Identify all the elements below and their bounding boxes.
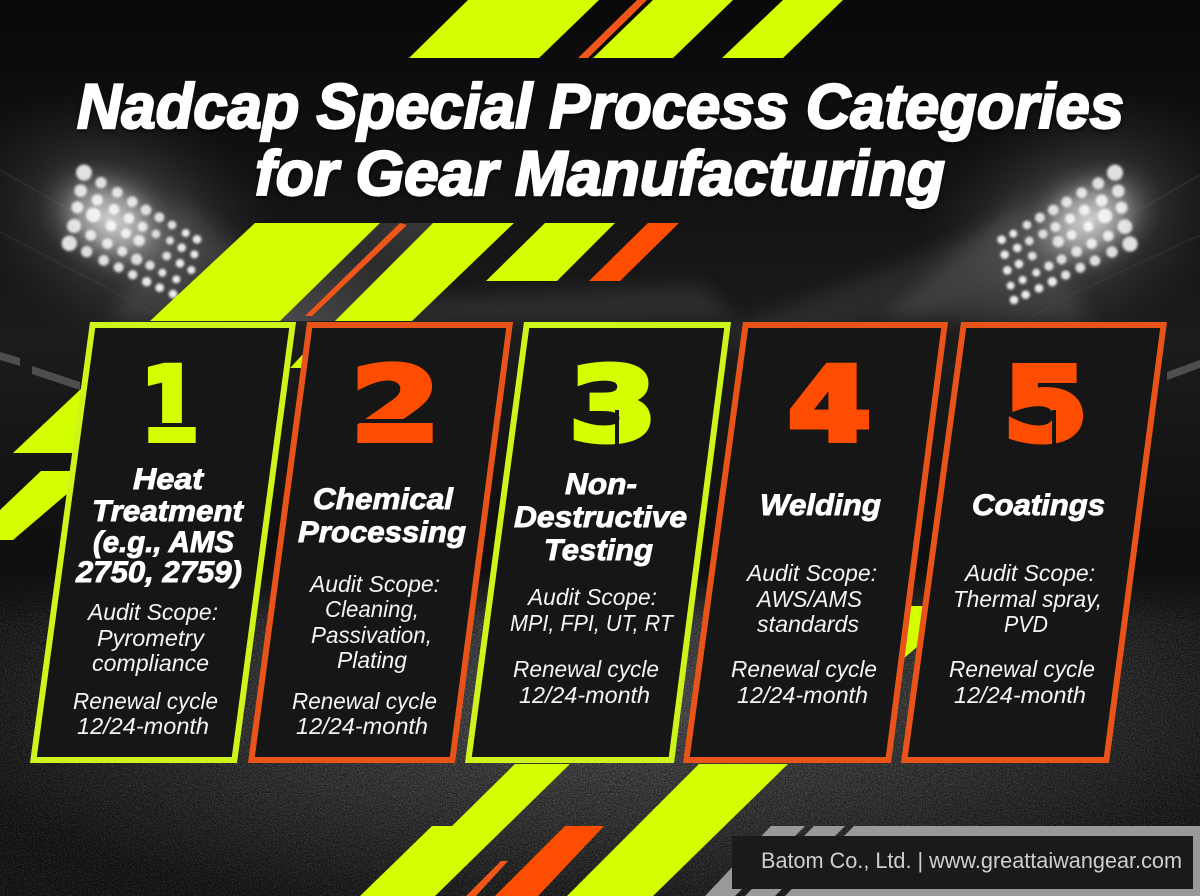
audit scope text: Audit Scope: xyxy=(86,599,218,625)
audit scope text: Plating xyxy=(337,647,407,673)
number 2: 2 xyxy=(351,346,440,465)
title: Nadcap Special Process Categories xyxy=(77,72,1124,142)
audit scope text: PVD xyxy=(1004,611,1048,637)
heading: chemical processing xyxy=(298,483,466,549)
audit scope text: Audit Scope: xyxy=(526,584,657,610)
number 1: 1 xyxy=(141,346,199,465)
audit scope text xyxy=(510,584,675,636)
renewal cycle text xyxy=(949,656,1095,708)
audit scope text xyxy=(745,560,877,637)
title xyxy=(77,72,1124,209)
audit scope text: Pyrometry xyxy=(97,625,206,651)
heading: heat treatment: Treatment xyxy=(92,495,245,528)
heading: chemical processing: Processing xyxy=(298,516,466,549)
heading: chemical processing: Chemical xyxy=(313,483,454,516)
renewal cycle text xyxy=(731,656,877,708)
heading: welding: Welding xyxy=(760,489,881,522)
middle diagonal stripes xyxy=(0,223,923,659)
heading: heat treatment: Heat xyxy=(133,463,205,496)
panel: non-destructive testing xyxy=(468,325,728,760)
audit scope text xyxy=(308,571,440,673)
heading: non-destructive testing: Destructive xyxy=(514,501,687,534)
audit scope text xyxy=(86,599,218,676)
audit scope text: Passivation, xyxy=(311,622,432,648)
panel: heat treatment xyxy=(33,325,293,760)
bottom diagonal stripes xyxy=(360,764,1200,896)
left stadium floodlight xyxy=(0,32,338,418)
audit scope text: Cleaning, xyxy=(325,596,419,622)
renewal cycle text: 12/24-month xyxy=(737,682,868,708)
renewal cycle text xyxy=(292,688,437,739)
renewal cycle text: Renewal cycle xyxy=(292,688,437,714)
renewal cycle text: Renewal cycle xyxy=(73,688,218,714)
heading: non-destructive testing xyxy=(514,468,687,567)
number 4: 4 xyxy=(788,346,871,465)
audit scope text: Audit Scope: xyxy=(308,571,440,597)
heading: non-destructive testing: Non- xyxy=(565,468,637,501)
panel: chemical processing xyxy=(251,325,510,760)
audit scope text: MPI, FPI, UT, RT xyxy=(510,610,675,636)
right stadium floodlight xyxy=(862,32,1200,418)
number 5: 5 xyxy=(1003,346,1088,465)
renewal cycle text: 12/24-month xyxy=(77,713,209,739)
renewal cycle text xyxy=(73,688,218,739)
top diagonal stripes xyxy=(409,0,843,58)
renewal cycle text: Renewal cycle xyxy=(513,656,659,682)
audit scope text: AWS/AMS xyxy=(755,586,863,612)
title: for Gear Manufacturing xyxy=(255,139,945,209)
panel: welding xyxy=(686,325,945,760)
audit scope text: compliance xyxy=(92,650,209,676)
footer company credit xyxy=(732,836,1193,889)
number 3: 3 xyxy=(569,346,657,465)
renewal cycle text: 12/24-month xyxy=(296,713,428,739)
audit scope text: standards xyxy=(757,611,859,637)
heading: heat treatment: 2750, 2759) xyxy=(75,556,242,589)
renewal cycle text xyxy=(513,656,659,708)
heading: heat treatment: (e.g., AMS xyxy=(93,526,234,559)
audit scope text: Thermal spray, xyxy=(953,586,1102,612)
heading: non-destructive testing: Testing xyxy=(544,534,653,567)
audit scope text xyxy=(953,560,1102,637)
renewal cycle text: 12/24-month xyxy=(519,682,650,708)
audit scope text: Audit Scope: xyxy=(963,560,1095,586)
audit scope text: Audit Scope: xyxy=(745,560,877,586)
footer company credit: Batom Co., Ltd. | www.greattaiwangear.com xyxy=(761,848,1182,873)
heading: heat treatment xyxy=(75,463,245,589)
panel: coatings xyxy=(904,325,1164,760)
renewal cycle text: Renewal cycle xyxy=(731,656,877,682)
heading: coatings: Coatings xyxy=(972,489,1105,522)
renewal cycle text: 12/24-month xyxy=(954,682,1086,708)
renewal cycle text: Renewal cycle xyxy=(949,656,1095,682)
